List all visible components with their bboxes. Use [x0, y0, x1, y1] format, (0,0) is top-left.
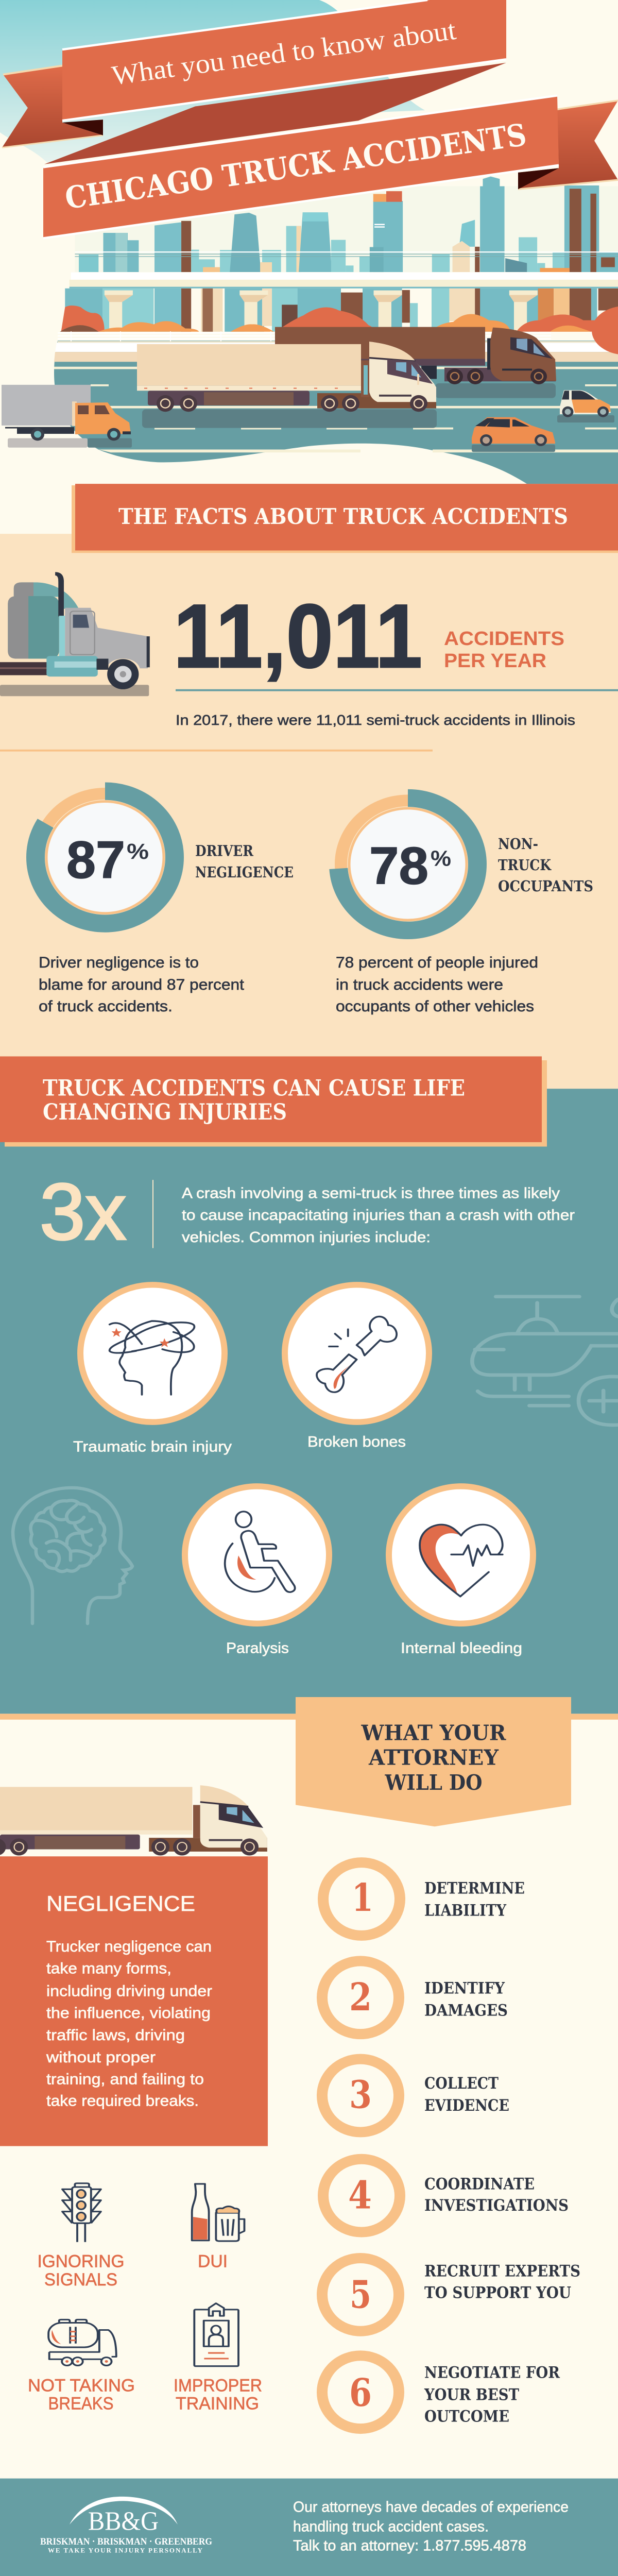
background icon: head with brain	[13, 1488, 132, 1623]
injury: internal bleeding	[389, 1486, 533, 1623]
donut: 78 percent non-truck occupants	[338, 798, 477, 930]
step 1 label: LIABILITY	[424, 1902, 507, 1920]
step 2 label: IDENTIFY	[424, 1979, 505, 1997]
step 1 label: DETERMINE	[424, 1879, 525, 1897]
bottom ribbon	[43, 96, 618, 238]
text: non-truck occupants description: occupants of other vehicles	[336, 998, 534, 1015]
step 1: determine liability	[323, 1862, 400, 1936]
logo: BB&G	[88, 2506, 159, 2536]
step 6 label: NEGOTIATE FOR	[424, 2364, 560, 2382]
label: internal bleeding: Internal bleeding	[401, 1640, 522, 1656]
negligence body text: traffic laws, driving	[46, 2027, 185, 2044]
injury: broken bones	[285, 1285, 429, 1422]
label: dui: DUI	[198, 2251, 228, 2271]
city skyline	[60, 177, 618, 332]
negligence body text: without proper	[46, 2049, 156, 2066]
attorney heading: WHAT YOUR	[361, 1721, 507, 1745]
text: non-truck occupants description: in truck accidents were	[336, 977, 503, 993]
step 6: negotiate	[322, 2355, 399, 2429]
label: non-truck occupants: NON-	[498, 836, 538, 853]
stat: 11,011 accidents per year: 11,011	[174, 586, 422, 687]
brown semi truck	[275, 327, 556, 398]
icon: broken bone	[317, 1316, 397, 1392]
stat divider line	[176, 689, 618, 691]
ribbon fold band	[44, 63, 506, 164]
footer	[0, 2479, 618, 2576]
label: non-truck occupants: OCCUPANTS	[498, 877, 593, 895]
negligence body text: the influence, violating	[46, 2005, 211, 2022]
negligence body text: take many forms,	[46, 1960, 171, 1977]
text: driver negligence description: Driver negligence is to	[39, 955, 199, 971]
small orange car	[557, 390, 614, 422]
number 4: 4	[348, 2173, 372, 2217]
label: non-truck occupants: TRUCK	[498, 857, 552, 874]
attorney heading: WILL DO	[385, 1770, 482, 1795]
label: not taking breaks: BREAKS	[48, 2394, 114, 2413]
icon: heart with pulse	[420, 1524, 503, 1597]
facts banner	[72, 484, 618, 553]
negligence body text: training, and failing to	[46, 2071, 204, 2088]
footer contact text: handling truck accident cases.	[293, 2518, 489, 2535]
label: improper training: TRAINING	[176, 2394, 259, 2413]
text: 3x description: vehicles. Common injuries include:	[182, 1229, 431, 1246]
step 3 label: COLLECT	[424, 2075, 499, 2093]
label: broken bones: Broken bones	[307, 1433, 406, 1450]
icon: semi truck cab	[0, 572, 150, 696]
negligence body text: including driving under	[46, 1983, 212, 1999]
negligence body text: take required breaks.	[46, 2093, 199, 2109]
logo: BRISKMAN · BRISKMAN · GREENBERG	[40, 2537, 212, 2547]
logo: WE TAKE YOUR INJURY PERSONALLY	[48, 2547, 202, 2554]
icon: id badge	[194, 2303, 238, 2366]
text: driver negligence description: blame for around 87 percent	[39, 977, 245, 993]
cream semi truck	[137, 342, 437, 428]
negligence body text: Trucker negligence can	[46, 1938, 212, 1955]
icon: bottle and beer mug	[192, 2184, 244, 2241]
stat: 3x: 3x	[40, 1167, 126, 1256]
injury: paralysis	[185, 1486, 329, 1623]
number 5: 5	[350, 2272, 371, 2317]
label: not taking breaks: NOT TAKING	[28, 2376, 135, 2395]
sky blob	[0, 0, 425, 163]
cream truck illustration	[0, 1785, 267, 1856]
stat label: PER YEAR	[444, 650, 546, 672]
background icon: helicopter	[472, 1297, 618, 1425]
injuries heading: TRUCK ACCIDENTS CAN CAUSE LIFE	[43, 1076, 465, 1101]
icon: traffic light	[62, 2183, 101, 2242]
step 4 label: INVESTIGATIONS	[424, 2197, 569, 2215]
negligence heading: NEGLIGENCE	[46, 1892, 195, 1916]
label: ignoring signals: IGNORING	[38, 2251, 125, 2271]
text: driver negligence description: of truck accidents.	[39, 998, 173, 1015]
step 2 label: DAMAGES	[424, 2002, 508, 2020]
step 2: identify damages	[322, 1961, 399, 2034]
percent sign 87: %	[127, 839, 149, 864]
icon: tanker truck	[48, 2319, 116, 2365]
facts heading: THE FACTS ABOUT TRUCK ACCIDENTS	[118, 504, 568, 530]
icon: wheelchair	[225, 1512, 295, 1592]
step 5 label: TO SUPPORT YOU	[424, 2284, 571, 2302]
step 3 label: EVIDENCE	[424, 2097, 509, 2115]
section divider	[0, 750, 433, 752]
number 6: 6	[349, 2370, 372, 2415]
78 percent value: 78	[369, 837, 428, 895]
donut: 87 percent driver negligence	[36, 791, 175, 924]
ribbon text: chicago truck accidents: CHICAGO TRUCK ACCIDENTS	[63, 117, 529, 216]
step 6 label: YOUR BEST	[424, 2386, 519, 2404]
icon: dizzy head	[110, 1321, 194, 1395]
logo	[40, 2497, 212, 2554]
step 4 label: COORDINATE	[424, 2175, 535, 2193]
number 1: 1	[352, 1875, 373, 1920]
text: 3x description: A crash involving a semi-truck is three times as likely	[182, 1185, 560, 1201]
step 6 label: OUTCOME	[424, 2408, 509, 2426]
87 percent value: 87	[66, 831, 125, 890]
text: 3x description: to cause incapacitating injuries than a crash with other	[182, 1207, 575, 1224]
number 3: 3	[349, 2072, 372, 2117]
stat description: In 2017, there were 11,011 semi-truck accidents in Illinois	[176, 712, 575, 728]
label: paralysis: Paralysis	[226, 1640, 289, 1656]
footer contact text: Talk to an attorney: 1.877.595.4878	[293, 2537, 526, 2554]
label: traumatic brain injury: Traumatic brain injury	[73, 1438, 232, 1455]
attorney heading: ATTORNEY	[368, 1745, 499, 1770]
3x divider	[152, 1180, 153, 1248]
injuries banner	[0, 1056, 547, 1146]
orange car	[472, 417, 555, 452]
stat label: ACCIDENTS	[444, 628, 564, 650]
road and fence	[54, 306, 618, 484]
left ribbon tail	[2, 65, 103, 147]
injuries heading: CHANGING INJURIES	[43, 1099, 287, 1125]
attorney banner	[296, 1697, 571, 1826]
label: ignoring signals: SIGNALS	[44, 2270, 117, 2290]
step 5 label: RECRUIT EXPERTS	[424, 2262, 580, 2280]
percent sign 78: %	[431, 846, 451, 871]
panel: negligence	[0, 1856, 268, 2146]
step 4: coordinate investigations	[323, 2159, 400, 2232]
text: non-truck occupants description: 78 percent of people injured	[336, 955, 538, 971]
step 3: collect evidence	[322, 2059, 399, 2132]
label: driver negligence: DRIVER	[195, 842, 254, 859]
footer contact text: Our attorneys have decades of experience	[293, 2499, 569, 2515]
grey box truck	[2, 385, 132, 448]
top ribbon	[2, 0, 506, 164]
label: driver negligence: NEGLIGENCE	[195, 864, 294, 881]
right ribbon tail	[518, 100, 618, 189]
step 5: recruit experts	[322, 2258, 399, 2331]
number 2: 2	[349, 1975, 372, 2020]
ribbon text: what you need to know: What you need to know about	[110, 14, 458, 91]
injury: traumatic brain injury	[80, 1285, 225, 1422]
label: improper training: IMPROPER	[174, 2376, 262, 2395]
